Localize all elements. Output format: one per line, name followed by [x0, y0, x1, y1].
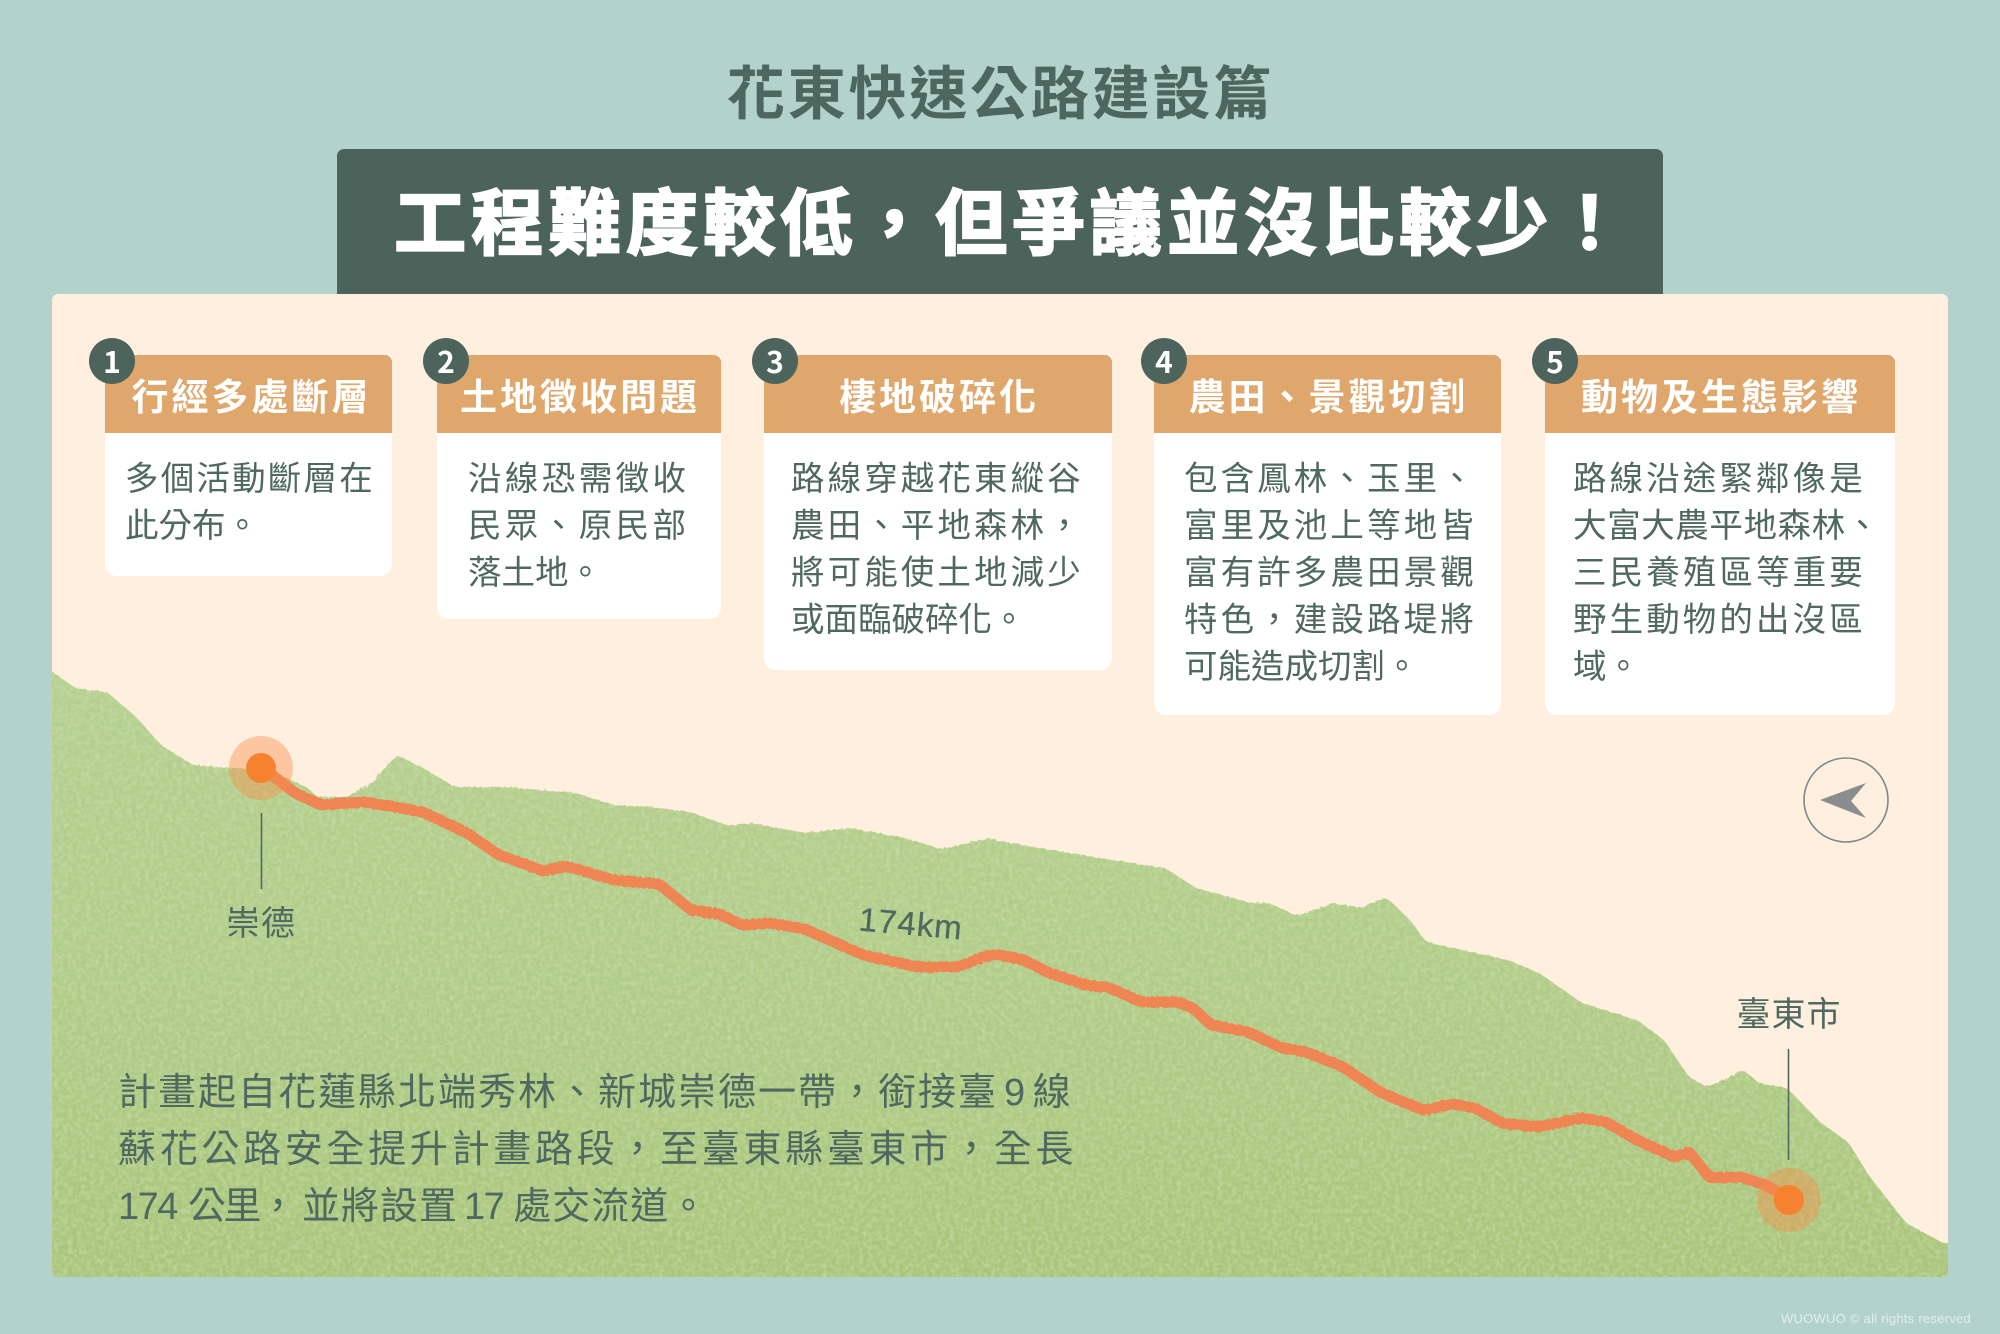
card 3 heading [764, 355, 1112, 433]
card 4 text: 可能造成切割。 [1184, 649, 1418, 686]
card 2 text [468, 461, 689, 592]
card 5 text: 三民養殖區等重要 [1573, 555, 1866, 592]
title: 花東快速公路建設篇 [727, 62, 1274, 127]
card 4 text [1184, 461, 1477, 686]
card 3 text: 或面臨破碎化。 [791, 602, 1026, 639]
card 4 [1154, 355, 1501, 715]
card 2 heading: 土地徵收問題 [460, 377, 700, 418]
card 3 [764, 355, 1112, 670]
card 3 text: 農田、平地森林， [791, 508, 1084, 545]
card 3 text: 將可能使土地減少 [791, 555, 1084, 592]
map: terrain, route and markers [52, 672, 1948, 1277]
label: end city: 臺東市 [1736, 996, 1842, 1034]
card 2 text: 落土地。 [468, 555, 602, 592]
card 2 text: 沿線恐需徵收 [468, 461, 689, 498]
headline text: 工程難度較低，但爭議並沒比較少！ [394, 185, 1631, 265]
headline banner [337, 149, 1663, 295]
card 4 heading [1154, 355, 1501, 433]
card 1 text [125, 461, 375, 545]
card 1 heading [105, 355, 392, 433]
card 4 text: 包含鳳林、玉里、 [1184, 461, 1477, 498]
card 5 text: 路線沿途緊鄰像是 [1573, 461, 1866, 498]
card 1 heading: 行經多處斷層 [132, 377, 372, 418]
card 4 text: 特色，建設路堤將 [1184, 602, 1477, 639]
description text: 蘇花公路安全提升計畫路段，至臺東縣臺東市，全長 [118, 1129, 1077, 1171]
card 4 text: 富里及池上等地皆 [1184, 508, 1477, 545]
badge 4 [1141, 338, 1187, 384]
card 5 text: 域。 [1573, 649, 1640, 686]
route line [263, 768, 1789, 1198]
leader line: end [1788, 1049, 1790, 1160]
card 2 [437, 355, 721, 619]
leader line: start [260, 813, 262, 889]
badge 2 [423, 338, 469, 384]
card 5 [1545, 355, 1895, 715]
badge 3 [752, 338, 798, 384]
card 4 text: 富有許多農田景觀 [1184, 555, 1477, 592]
card 3 text: 路線穿越花東縱谷 [791, 461, 1084, 498]
badge 5 [1532, 338, 1578, 384]
card 5 text: 野生動物的出沒區 [1573, 602, 1866, 639]
card 1 text: 此分布。 [125, 508, 259, 545]
distance label: 174km [858, 901, 964, 946]
card 5 text [1573, 461, 1880, 686]
badge 1: 1 [103, 338, 121, 382]
card 1 [105, 355, 392, 576]
badge 5: 5 [1546, 338, 1564, 382]
marker: start [229, 736, 293, 800]
terrain [30, 660, 1975, 1300]
panel: main cream background [52, 294, 1948, 1277]
card 5 heading [1545, 355, 1895, 433]
card 4 heading: 農田、景觀切割 [1188, 377, 1468, 418]
badge 1 [89, 338, 135, 384]
badge 4: 4 [1155, 338, 1173, 382]
card 2 heading [437, 355, 721, 433]
badge 2: 2 [437, 338, 455, 382]
card 3 heading: 棲地破碎化 [839, 377, 1039, 418]
marker: end [1757, 1168, 1821, 1232]
card 2 text: 民眾、原民部 [468, 508, 689, 545]
card 5 heading: 動物及生態影響 [1581, 377, 1861, 418]
card 1 text: 多個活動斷層在 [125, 461, 375, 498]
badge 3: 3 [766, 338, 784, 382]
description text: 174 公里，並將設置17 處交流道。 [118, 1186, 708, 1228]
description text [118, 1072, 1077, 1228]
icon: compass [1804, 758, 1888, 842]
card 3 text [791, 461, 1084, 639]
credit: WUOWUO © all rights reserved [1781, 1311, 1971, 1326]
card 5 text: 大富大農平地森林、 [1573, 508, 1880, 545]
label: start town: 崇德 [226, 905, 296, 943]
description text: 計畫起自花蓮縣北端秀林、新城崇德一帶，銜接臺9線 [118, 1072, 1073, 1114]
